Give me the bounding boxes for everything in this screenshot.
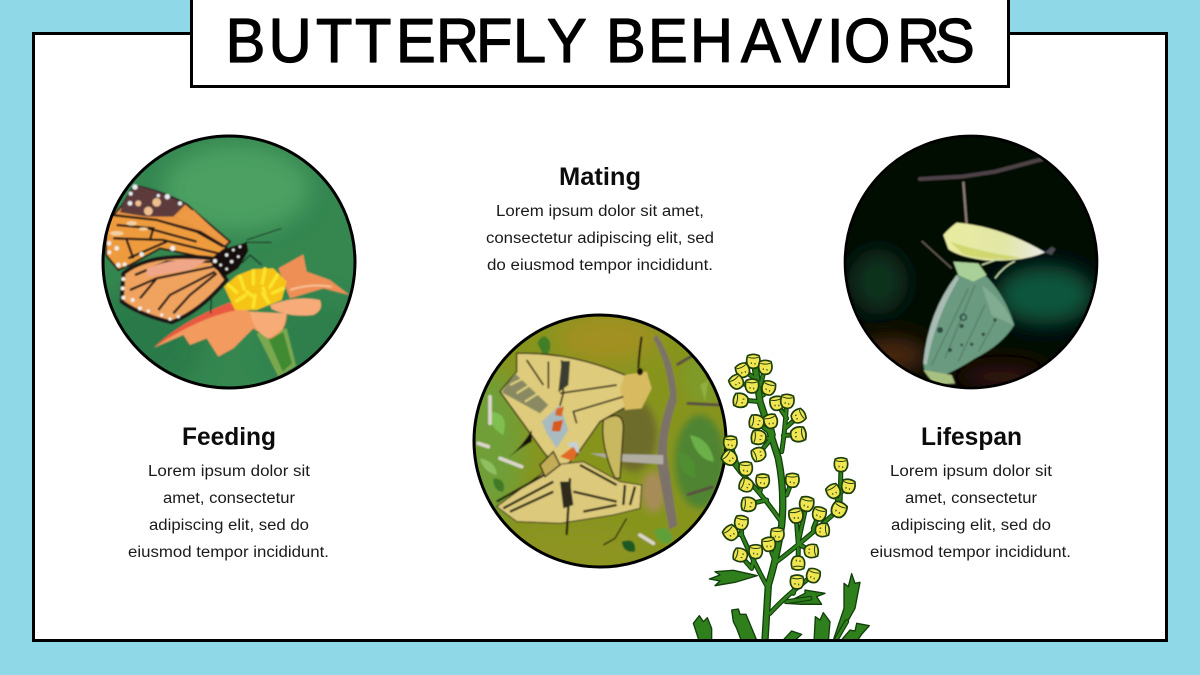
stems fill — [730, 365, 848, 642]
heading: Feeding: Feeding — [182, 423, 276, 451]
body — [211, 242, 248, 277]
lower butterfly — [497, 462, 642, 523]
branch — [653, 335, 677, 530]
rear petals — [278, 254, 349, 298]
text: Lifespan description: eiusmod tempor incididunt. — [870, 544, 1071, 561]
text: Mating description: Lorem ipsum dolor sit amet, — [496, 203, 704, 220]
antenna — [922, 241, 952, 268]
hind wing — [122, 257, 227, 322]
heading: Lifespan: Lifespan — [921, 423, 1022, 451]
leaves — [693, 570, 869, 642]
text: Lifespan description: amet, consectetur — [905, 490, 1037, 507]
twig — [920, 159, 1042, 179]
fore wing — [106, 214, 227, 270]
photo: butterfly emerging from chrysalis — [844, 134, 1098, 390]
text: Feeding description: Lorem ipsum dolor sit — [148, 463, 311, 480]
text: Mating description: consectetur adipiscing elit, sed — [486, 230, 714, 247]
upper butterfly — [498, 352, 626, 464]
front petals — [154, 302, 287, 357]
title: BUTTERFLY BEHAVIORS — [226, 6, 975, 75]
text: Mating description: do eiusmod tempor incididunt. — [487, 257, 713, 274]
stem — [257, 328, 296, 377]
flower centre — [224, 268, 287, 310]
flower buds — [719, 354, 856, 589]
text: Lifespan description — [870, 463, 1071, 561]
stems outline — [730, 365, 848, 642]
photo: mating swallowtail butterflies — [472, 314, 728, 568]
text: Lifespan description: Lorem ipsum dolor sit — [890, 463, 1053, 480]
pale twigs — [478, 397, 653, 543]
rear wing — [113, 186, 230, 248]
outline — [103, 136, 355, 388]
foliage — [480, 336, 714, 552]
abdomen — [603, 416, 623, 478]
title box — [192, 0, 1008, 86]
antennae and legs — [245, 228, 282, 242]
illustration: flowering plant — [693, 354, 869, 642]
heading: Mating: Mating — [559, 163, 641, 191]
text: Feeding description — [128, 463, 329, 561]
text: Feeding description: amet, consectetur — [163, 490, 295, 507]
photo: monarch butterfly feeding on orange flower — [102, 134, 356, 390]
butterfly — [923, 274, 1014, 380]
text: Lifespan description: adipiscing elit, sed do — [891, 517, 1051, 534]
outline — [845, 136, 1097, 388]
text: Feeding description: adipiscing elit, sed do — [149, 517, 309, 534]
text: Mating description — [486, 203, 714, 274]
text: Feeding description: eiusmod tempor incididunt. — [128, 544, 329, 561]
outline — [474, 315, 726, 567]
chrysalis — [943, 223, 1045, 261]
